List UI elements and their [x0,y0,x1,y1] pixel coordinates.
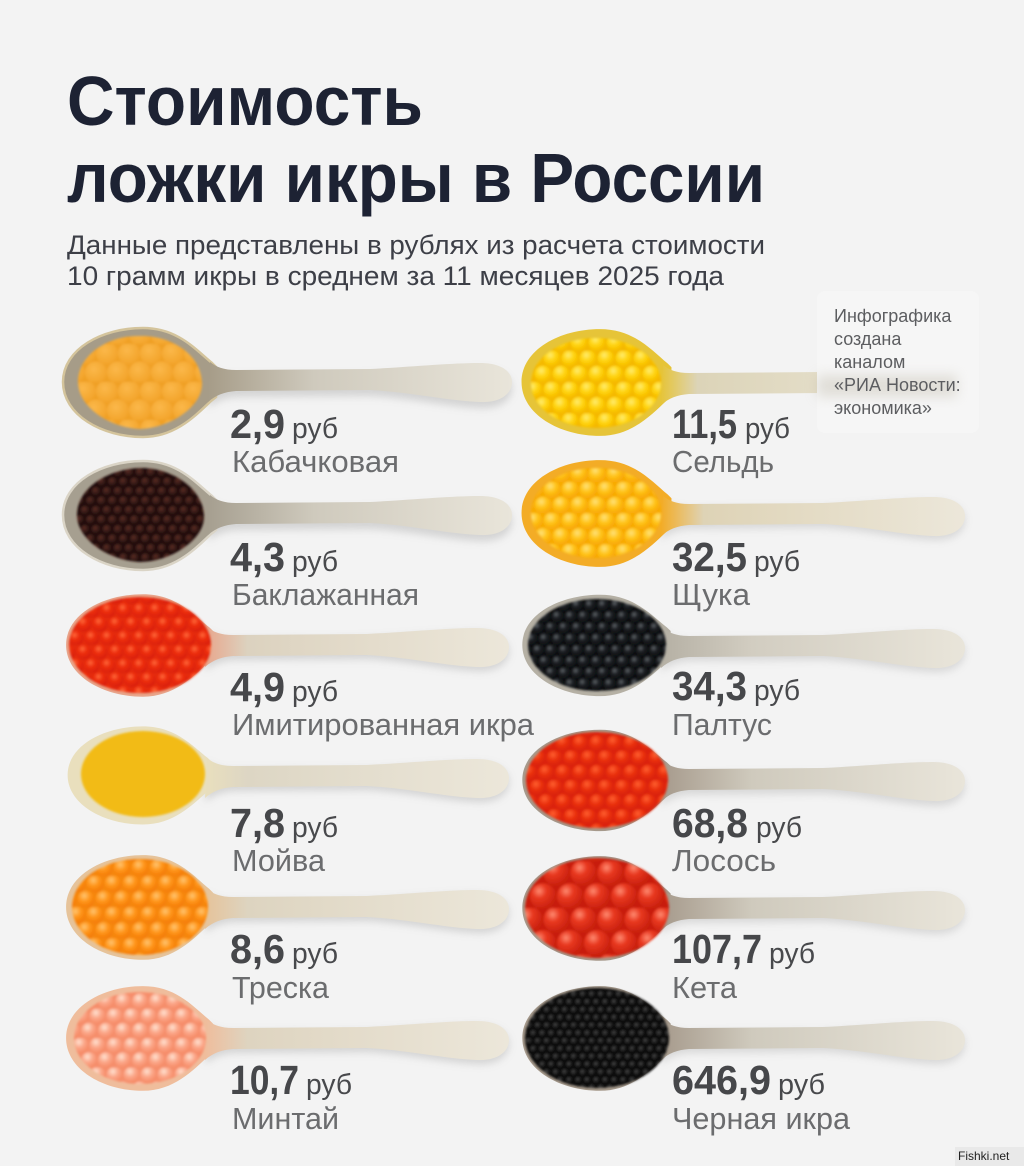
price: руб [756,812,802,844]
item: Минтай [66,986,509,1136]
item: Палтус [522,595,965,742]
price [230,534,338,580]
name: Лосось [672,843,776,878]
price [672,800,802,846]
price: руб [306,1069,352,1101]
price: руб [292,812,338,844]
price: 8,6 [230,926,285,972]
icon: spoon with black caviar [522,986,965,1091]
title: Стоимость [67,62,423,140]
subtitle [67,230,765,291]
item: Баклажанная [63,461,512,612]
price: руб [754,675,800,707]
name: Кабачковая [232,444,399,479]
icon: spoon with cod caviar [66,855,509,960]
item: Кета [522,856,965,1005]
icon: spoon with halibut caviar [522,595,965,696]
price: руб [292,676,338,708]
callout: channel credit card: каналом [834,352,905,372]
price: 7,8 [230,800,285,846]
icon: spoon with pike caviar [522,460,965,567]
price [672,534,800,580]
price: руб [754,546,800,578]
icon: spoon with capelin caviar [68,726,509,824]
callout: channel credit card [817,291,979,433]
item: Сельдь [522,329,965,479]
price: 2,9 [230,401,285,447]
callout: channel credit card: «РИА Новости: [834,375,961,395]
name: Минтай [232,1101,339,1136]
name: Кета [672,970,738,1005]
subtitle: Данные представлены в рублях из расчета стоимости [67,230,765,260]
item: Кабачковая [63,328,512,479]
price [230,926,338,972]
title [67,62,765,217]
subtitle: 10 грамм икры в среднем за 11 месяцев 2025 года [67,261,725,291]
price: 34,3 [672,663,747,709]
price: руб [745,413,790,445]
price [230,664,338,710]
callout: channel credit card: создана [834,329,902,349]
icon: spoon with salmon caviar [522,730,965,831]
price: 107,7 [672,926,762,972]
callout: channel credit card: экономика» [834,398,932,418]
price: 4,3 [230,534,285,580]
item: Мойва [68,726,509,878]
callout: channel credit card: Инфографика [834,306,952,326]
price: 646,9 [672,1057,771,1103]
name: Треска [232,970,330,1005]
icon: spoon with imitation caviar [66,594,509,697]
price: руб [292,546,338,578]
price [230,800,338,846]
name: Мойва [232,843,326,878]
price: руб [292,938,338,970]
item: Имитированная икра [66,594,535,742]
price: руб [769,938,815,970]
price [672,401,790,447]
icon: spoon with pollock caviar [66,986,509,1091]
item: Лосось [522,730,965,878]
name: Палтус [672,707,772,742]
item: Черная икра [522,986,965,1136]
price [230,401,338,447]
name: Щука [672,577,751,612]
icon: spoon with herring caviar [522,329,965,436]
price: 10,7 [230,1057,299,1103]
price: 4,9 [230,664,285,710]
watermark [955,1147,1024,1166]
price: руб [778,1069,825,1101]
price: руб [292,413,338,445]
price: 32,5 [672,534,747,580]
name: Черная икра [672,1101,851,1136]
title: ложки икры в России [67,139,765,217]
item: Треска [66,855,509,1005]
price [672,1057,825,1103]
watermark: Fishki.net [958,1149,1010,1163]
price: 68,8 [672,800,748,846]
price: 11,5 [672,401,737,447]
icon: spoon with squash caviar [63,328,512,437]
price [672,663,800,709]
name: Баклажанная [232,577,419,612]
icon: spoon with chum salmon caviar [522,856,965,961]
name: Имитированная икра [232,707,535,742]
price [230,1057,352,1103]
name: Сельдь [672,444,774,479]
item: Щука [522,460,965,612]
icon: spoon with eggplant caviar [63,461,512,570]
